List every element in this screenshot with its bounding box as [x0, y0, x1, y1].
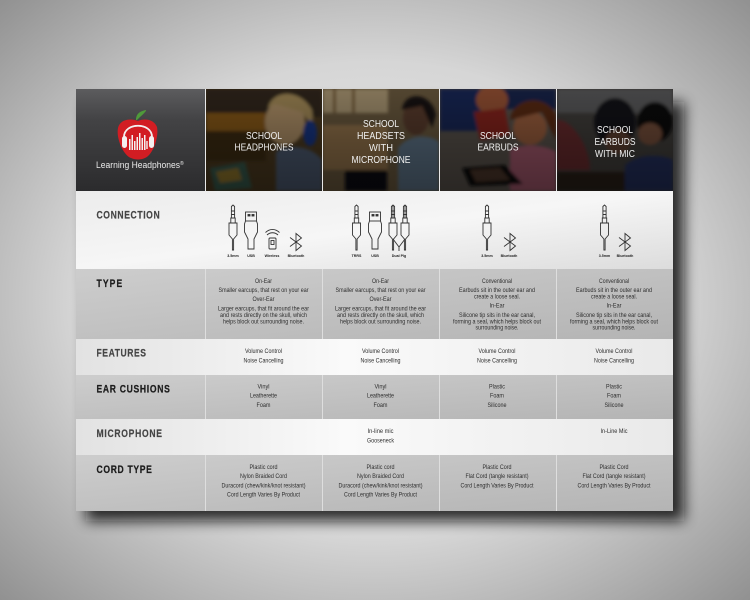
ear cushions text: Silicone [604, 402, 624, 409]
row: microphone [76, 419, 673, 455]
cord type text: Cord Length Varies By Product [578, 482, 651, 489]
cord type text: Nylon Braided Cord [240, 473, 287, 480]
ear cushions text: Silicone [488, 402, 507, 409]
cord type text: Cord Length Varies By Product [227, 492, 300, 499]
type text: column 2: and rests directly on the skull, which [337, 312, 424, 319]
row: connection [76, 191, 673, 269]
row: cord type [76, 455, 673, 511]
microphone text: In-line mic [368, 428, 394, 435]
header title: SCHOOL [246, 130, 282, 142]
type text: column 4 [570, 278, 658, 332]
type text: column 4: Conventional [599, 278, 629, 285]
type text: column 1: On-Ear [255, 278, 273, 285]
row: type [76, 269, 673, 339]
features text: Noise Cancelling [360, 357, 401, 364]
registered mark: ® [180, 160, 184, 167]
cord type text: Cord Length Varies By Product [344, 492, 417, 499]
type text: column 1 [218, 278, 310, 326]
icons: column 1 connectors: USB [247, 254, 255, 258]
ear cushions text: Leatherette [367, 393, 394, 400]
cord type text: Flat Cord (tangle resistant) [466, 473, 528, 480]
header title: EARBUDS [478, 142, 518, 154]
header title: HEADSETS [357, 130, 405, 142]
heading: cord type: CORD TYPE [96, 464, 152, 476]
row: features [76, 339, 673, 375]
icons: column 3 connectors [481, 205, 517, 258]
icons: column 3 connectors: 3.5mm [481, 254, 493, 258]
type text: column 3: In-Ear [490, 303, 505, 310]
type text: column 2 [335, 278, 427, 326]
panel: school headphones header [206, 89, 322, 191]
type text: column 3: Conventional [482, 278, 512, 285]
type text: column 3: Silicone tip sits in the ear canal, [459, 312, 535, 319]
features text: Volume Control [362, 348, 399, 355]
panel: school earbuds with mic header [557, 89, 673, 191]
type text: column 4: In-Ear [606, 303, 622, 310]
type text: column 1: Over-Ear [252, 296, 275, 303]
type text: column 4: surrounding noise. [592, 325, 636, 332]
panel: logo [76, 89, 205, 191]
heading: microphone: MICROPHONE [96, 428, 162, 440]
type text: column 1: Larger earcups, that fit around the ear [218, 305, 310, 312]
icons: column 1 connectors: 3.5mm [227, 254, 239, 258]
heading: ear cushions: EAR CUSHIONS [96, 383, 170, 396]
ear cushions text: Leatherette [250, 393, 277, 400]
microphone text: In-Line Mic [600, 428, 628, 435]
features text: Volume Control [245, 348, 282, 355]
panel: school headsets with microphone header [323, 89, 439, 191]
type text: column 1: helps block out surrounding noise. [223, 319, 304, 326]
icons: column 4 connectors: 3.5mm [599, 254, 610, 258]
cord type text: Nylon Braided Cord [357, 473, 404, 480]
type text: column 4: forming a seal, which helps block out [570, 319, 658, 326]
cord type text: Plastic cord [366, 464, 395, 471]
type text: column 2: Larger earcups, that fit around the ear [335, 305, 427, 312]
header title: SCHOOL [363, 118, 399, 130]
type text: column 1: Smaller earcups, that rest on your ear [218, 287, 309, 294]
icons: column 4 connectors: Bluetooth [617, 254, 633, 258]
header title: WITH [369, 142, 393, 154]
icons: column 2 connectors: USB [371, 254, 379, 258]
cord type text: Duracord (chew/kink/knot resistant) [222, 482, 306, 489]
type text: column 2: helps block out surrounding noise. [340, 319, 421, 326]
type text: column 3: surrounding noise. [476, 325, 519, 332]
card shadow [86, 102, 684, 521]
ear cushions text: Vinyl [374, 384, 387, 391]
type text: column 4: create a loose seal. [591, 293, 637, 300]
type text: column 3: Earbuds sit in the outer ear and [459, 287, 535, 294]
header title: HEADPHONES [234, 142, 294, 154]
cord type text: Flat Cord (tangle resistant) [582, 473, 646, 480]
microphone text [367, 428, 628, 444]
heading: features: FEATURES [96, 348, 146, 360]
cord type text: Plastic Cord [600, 464, 629, 471]
type text: column 3: create a loose seal. [474, 293, 520, 300]
icons: column 2 connectors: Dual Plg [392, 254, 406, 258]
microphone text: Gooseneck [367, 437, 394, 444]
ear cushions text: Plastic [606, 384, 622, 391]
type text: column 1: and rests directly on the skull, which [220, 312, 307, 319]
icons: column 1 connectors: Wireless [265, 254, 279, 258]
icons: column 3 connectors: Bluetooth [501, 254, 517, 258]
features text: Noise Cancelling [244, 357, 284, 364]
panel: school earbuds header [440, 86, 556, 191]
cord type text: Duracord (chew/kink/knot resistant) [338, 482, 422, 489]
header title [234, 130, 294, 154]
features text: Volume Control [596, 348, 633, 355]
header title: MICROPHONE [352, 154, 410, 166]
header title [352, 118, 410, 166]
ear cushions text: Foam [490, 393, 504, 400]
ear cushions text: Plastic [489, 384, 505, 391]
type text: column 4: Silicone tip sits in the ear canal, [576, 312, 652, 319]
icons: column 2 connectors: TRRS [352, 254, 362, 258]
cord type text: Plastic Cord [482, 464, 512, 471]
logo wordmark: Learning Headphones [96, 160, 180, 170]
ear cushions text: Foam [607, 393, 621, 400]
icons: column 1 connectors [227, 205, 304, 258]
header title: WITH MIC [595, 148, 635, 160]
ear cushions text: Foam [374, 402, 388, 409]
header title: SCHOOL [597, 124, 633, 136]
features text: Noise Cancelling [594, 357, 634, 364]
heading: connection: CONNECTION [96, 210, 160, 222]
header title [594, 124, 636, 160]
ear cushions text [250, 384, 624, 409]
type text: column 2: On-Ear [372, 278, 390, 285]
cord type text [222, 464, 651, 499]
features text: Noise Cancelling [477, 357, 517, 364]
type text: column 4: Earbuds sit in the outer ear and [576, 287, 652, 294]
header title: SCHOOL [480, 130, 516, 142]
type text: column 3: forming a seal, which helps block out [453, 319, 541, 326]
icons: column 1 connectors: Bluetooth [288, 254, 304, 258]
type text: column 3 [453, 278, 541, 332]
icon: apple logo [118, 110, 157, 160]
icons: column 4 connectors [599, 205, 633, 258]
cord type text: Cord Length Varies By Product [460, 482, 534, 489]
type text: column 2: Over-Ear [370, 296, 392, 303]
icons: column 2 connectors [352, 205, 409, 258]
header title: EARBUDS [594, 136, 636, 148]
row: ear cushions [76, 375, 673, 419]
ear cushions text: Foam [256, 402, 271, 409]
ear cushions text: Vinyl [258, 384, 270, 391]
cord type text: Plastic cord [250, 464, 278, 471]
features text [244, 348, 634, 364]
type text: column 2: Smaller earcups, that rest on your ear [336, 287, 426, 294]
heading: type: TYPE [96, 278, 123, 290]
features text: Volume Control [478, 348, 516, 355]
header title [478, 130, 518, 154]
